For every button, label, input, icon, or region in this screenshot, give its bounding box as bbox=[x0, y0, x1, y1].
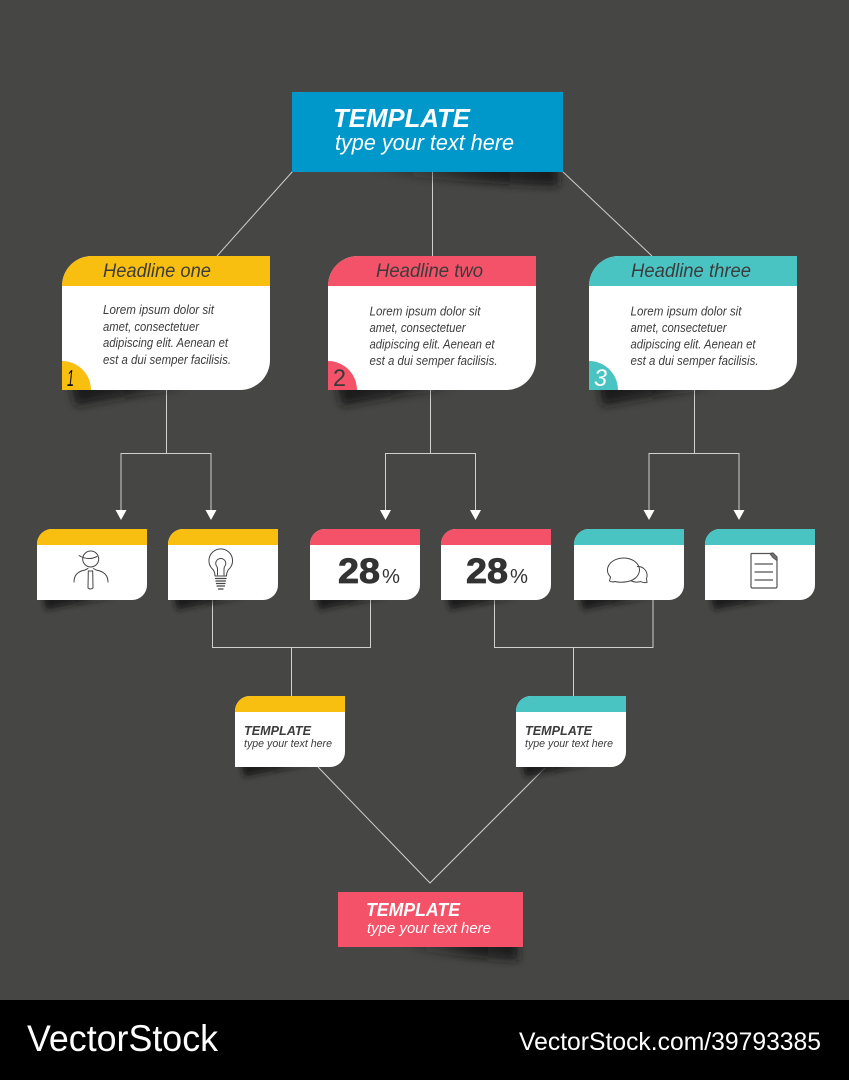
percent value: % bbox=[382, 566, 400, 588]
top box title: TEMPLATE bbox=[333, 103, 471, 133]
panel: top template box bbox=[292, 92, 563, 186]
headline two title: Headline two bbox=[376, 261, 483, 282]
card title: TEMPLATE bbox=[244, 723, 311, 738]
top box subtitle: type your text here bbox=[335, 130, 514, 155]
badge number 2 bbox=[328, 361, 357, 392]
connector lines: headline three to icon cards bbox=[644, 390, 744, 520]
panel: mid template card left bbox=[235, 696, 345, 777]
connector lines: small cards to mid cards bbox=[212, 600, 653, 696]
headline two body: Lorem ipsum dolor sit bbox=[370, 304, 481, 318]
headline three title: Headline three bbox=[631, 261, 751, 282]
panel: percent card red one bbox=[310, 529, 420, 610]
headline one body bbox=[103, 303, 231, 367]
connector lines: mid cards to bottom box bbox=[318, 767, 545, 883]
panel: headline three bbox=[589, 256, 797, 406]
headline three body bbox=[630, 304, 758, 368]
headline three body: Lorem ipsum dolor sit bbox=[630, 304, 742, 318]
headline two body: adipiscing elit. Aenean et bbox=[370, 338, 495, 352]
headline three body: adipiscing elit. Aenean et bbox=[630, 338, 756, 352]
headline one body: Lorem ipsum dolor sit bbox=[103, 303, 214, 317]
percent value bbox=[338, 552, 400, 591]
panel: document card bbox=[705, 529, 815, 610]
panel: headline two bbox=[328, 256, 536, 406]
panel: chat card bbox=[574, 529, 684, 610]
icon: speech bubbles bbox=[607, 558, 647, 583]
icon: light bulb bbox=[209, 549, 233, 589]
connector lines: headline two to percent cards bbox=[380, 390, 481, 520]
bottom box subtitle: type your text here bbox=[367, 920, 491, 937]
headline two body: est a dui semper facilisis. bbox=[370, 354, 498, 368]
percent value bbox=[466, 552, 528, 591]
percent value: % bbox=[510, 566, 528, 588]
headline three body: est a dui semper facilisis. bbox=[630, 354, 758, 368]
headline one body: adipiscing elit. Aenean et bbox=[103, 336, 228, 350]
headline one body: amet, consectetuer bbox=[103, 320, 200, 334]
card subtitle: type your text here bbox=[244, 738, 332, 750]
headline one title: Headline one bbox=[103, 261, 211, 282]
card title: TEMPLATE bbox=[525, 723, 592, 738]
panel: headline one bbox=[62, 256, 270, 406]
headline two body bbox=[370, 304, 498, 368]
headline two body: amet, consectetuer bbox=[370, 321, 466, 335]
percent value: 28 bbox=[338, 552, 380, 591]
percent value: 28 bbox=[466, 552, 508, 591]
card subtitle: type your text here bbox=[525, 738, 613, 750]
panel: person card bbox=[37, 529, 147, 610]
footer url text: VectorStock.com/39793385 bbox=[519, 1028, 821, 1056]
panel: light bulb card bbox=[168, 529, 278, 610]
connector lines: top box to headline cards bbox=[217, 171, 652, 256]
connector lines: headline one to icon cards bbox=[116, 390, 216, 520]
headline one body: est a dui semper facilisis. bbox=[103, 353, 231, 367]
icon: document bbox=[751, 553, 777, 588]
panel: percent card red two bbox=[441, 529, 551, 610]
badge number 2: 2 bbox=[333, 365, 346, 392]
headline three body: amet, consectetuer bbox=[630, 321, 727, 335]
badge number 1 bbox=[62, 361, 91, 391]
footer logo text: VectorStock bbox=[27, 1018, 218, 1059]
bottom box title: TEMPLATE bbox=[366, 900, 461, 920]
footer bar bbox=[0, 1000, 849, 1080]
panel: mid template card right bbox=[516, 696, 626, 777]
badge number 3: 3 bbox=[594, 365, 608, 392]
icon: person with tie bbox=[74, 551, 108, 589]
panel: bottom template box bbox=[338, 892, 523, 960]
badge number 3 bbox=[589, 361, 618, 392]
badge number 1: 1 bbox=[67, 365, 74, 391]
